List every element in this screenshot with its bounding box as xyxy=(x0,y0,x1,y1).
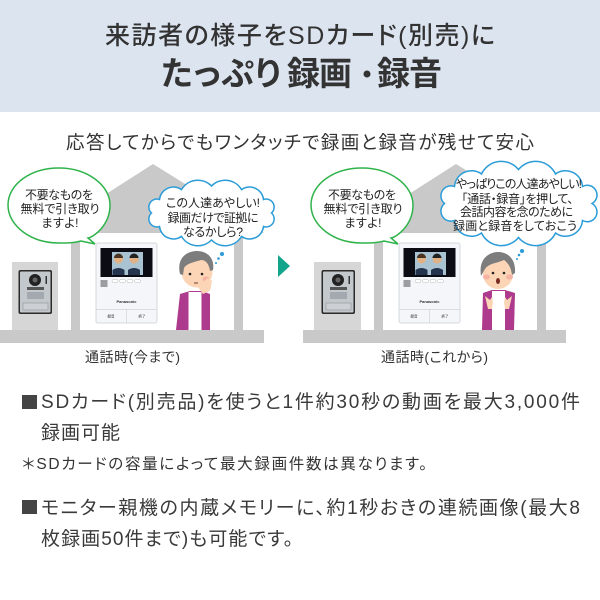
thought cloud xyxy=(441,161,597,260)
bullet 1 xyxy=(22,391,580,444)
bullet 1: SDカード(別売品)を使うと1件約30秒の動画を最大3,000件 xyxy=(41,391,580,413)
speech bubble: visitor: 無料で引き取り xyxy=(324,201,402,216)
subheading: 応答してからでもワンタッチで録画と録音が残せて安心 xyxy=(66,132,534,153)
indoor monitor: 録音 xyxy=(108,314,115,318)
speech bubble: visitor: ますよ! xyxy=(42,216,78,230)
speech bubble: visitor xyxy=(8,168,110,244)
speech bubble: visitor: 無料で引き取り xyxy=(20,201,100,216)
indoor monitor: 終了 xyxy=(442,314,449,318)
thought cloud: この人達あやしい! xyxy=(166,196,260,210)
caption: 通話時(今まで) xyxy=(85,349,180,365)
title line 2: 録音 xyxy=(377,55,442,92)
entrance pillar xyxy=(314,262,361,330)
speech bubble: visitor xyxy=(311,168,413,244)
arrow xyxy=(278,255,290,277)
indoor monitor xyxy=(399,243,460,323)
speech bubble: visitor: 不要なものを xyxy=(328,188,396,202)
title line 2: たっぷり xyxy=(161,55,281,92)
thought cloud: やっぱりこの人達あやしい! xyxy=(456,177,582,191)
thought cloud xyxy=(149,180,274,264)
entrance pillar xyxy=(12,262,58,330)
house xyxy=(303,164,567,343)
thought cloud: 会話内容を念のために xyxy=(460,205,573,219)
bullet 1: 録画可能 xyxy=(41,422,120,444)
thought cloud: 「通話・録音」を押して、 xyxy=(462,192,574,206)
scene: before (今まで) xyxy=(0,164,274,365)
title line 2 xyxy=(161,55,442,92)
speech bubble: visitor: 不要なものを xyxy=(25,188,93,202)
door intercom xyxy=(18,270,52,314)
header band xyxy=(0,0,600,112)
indoor monitor: Panasonic xyxy=(116,299,137,304)
speech bubble: visitor: ますよ! xyxy=(344,216,382,230)
thought cloud: 録画だけで証拠に xyxy=(168,211,258,225)
indoor monitor: Panasonic xyxy=(419,299,440,304)
indoor monitor: 終了 xyxy=(138,314,146,318)
indoor monitor xyxy=(96,243,157,323)
thought cloud: なるかしら? xyxy=(183,225,243,239)
thought cloud: 録画と録音をしておこう xyxy=(453,219,577,233)
bullet 2 xyxy=(22,497,580,550)
caption: 通話時(これから) xyxy=(381,349,488,365)
bullet 2: モニター親機の内蔵メモリーに、約1秒おきの連続画像(最大8 xyxy=(41,497,580,519)
house xyxy=(0,164,264,343)
person: worried woman xyxy=(176,251,213,330)
person: surprised woman xyxy=(481,252,515,330)
scene: after (これから) xyxy=(303,161,597,365)
bullet 2: 枚録画50件まで)も可能です。 xyxy=(41,528,293,550)
title line 1: 来訪者の様子をSDカード(別売)に xyxy=(105,22,495,50)
footnote: ＊SDカードの容量によって最大録画件数は異なります。 xyxy=(22,455,427,473)
door intercom xyxy=(322,270,355,314)
title line 2: 録画 xyxy=(287,55,352,92)
indoor monitor: 録音 xyxy=(410,314,418,318)
